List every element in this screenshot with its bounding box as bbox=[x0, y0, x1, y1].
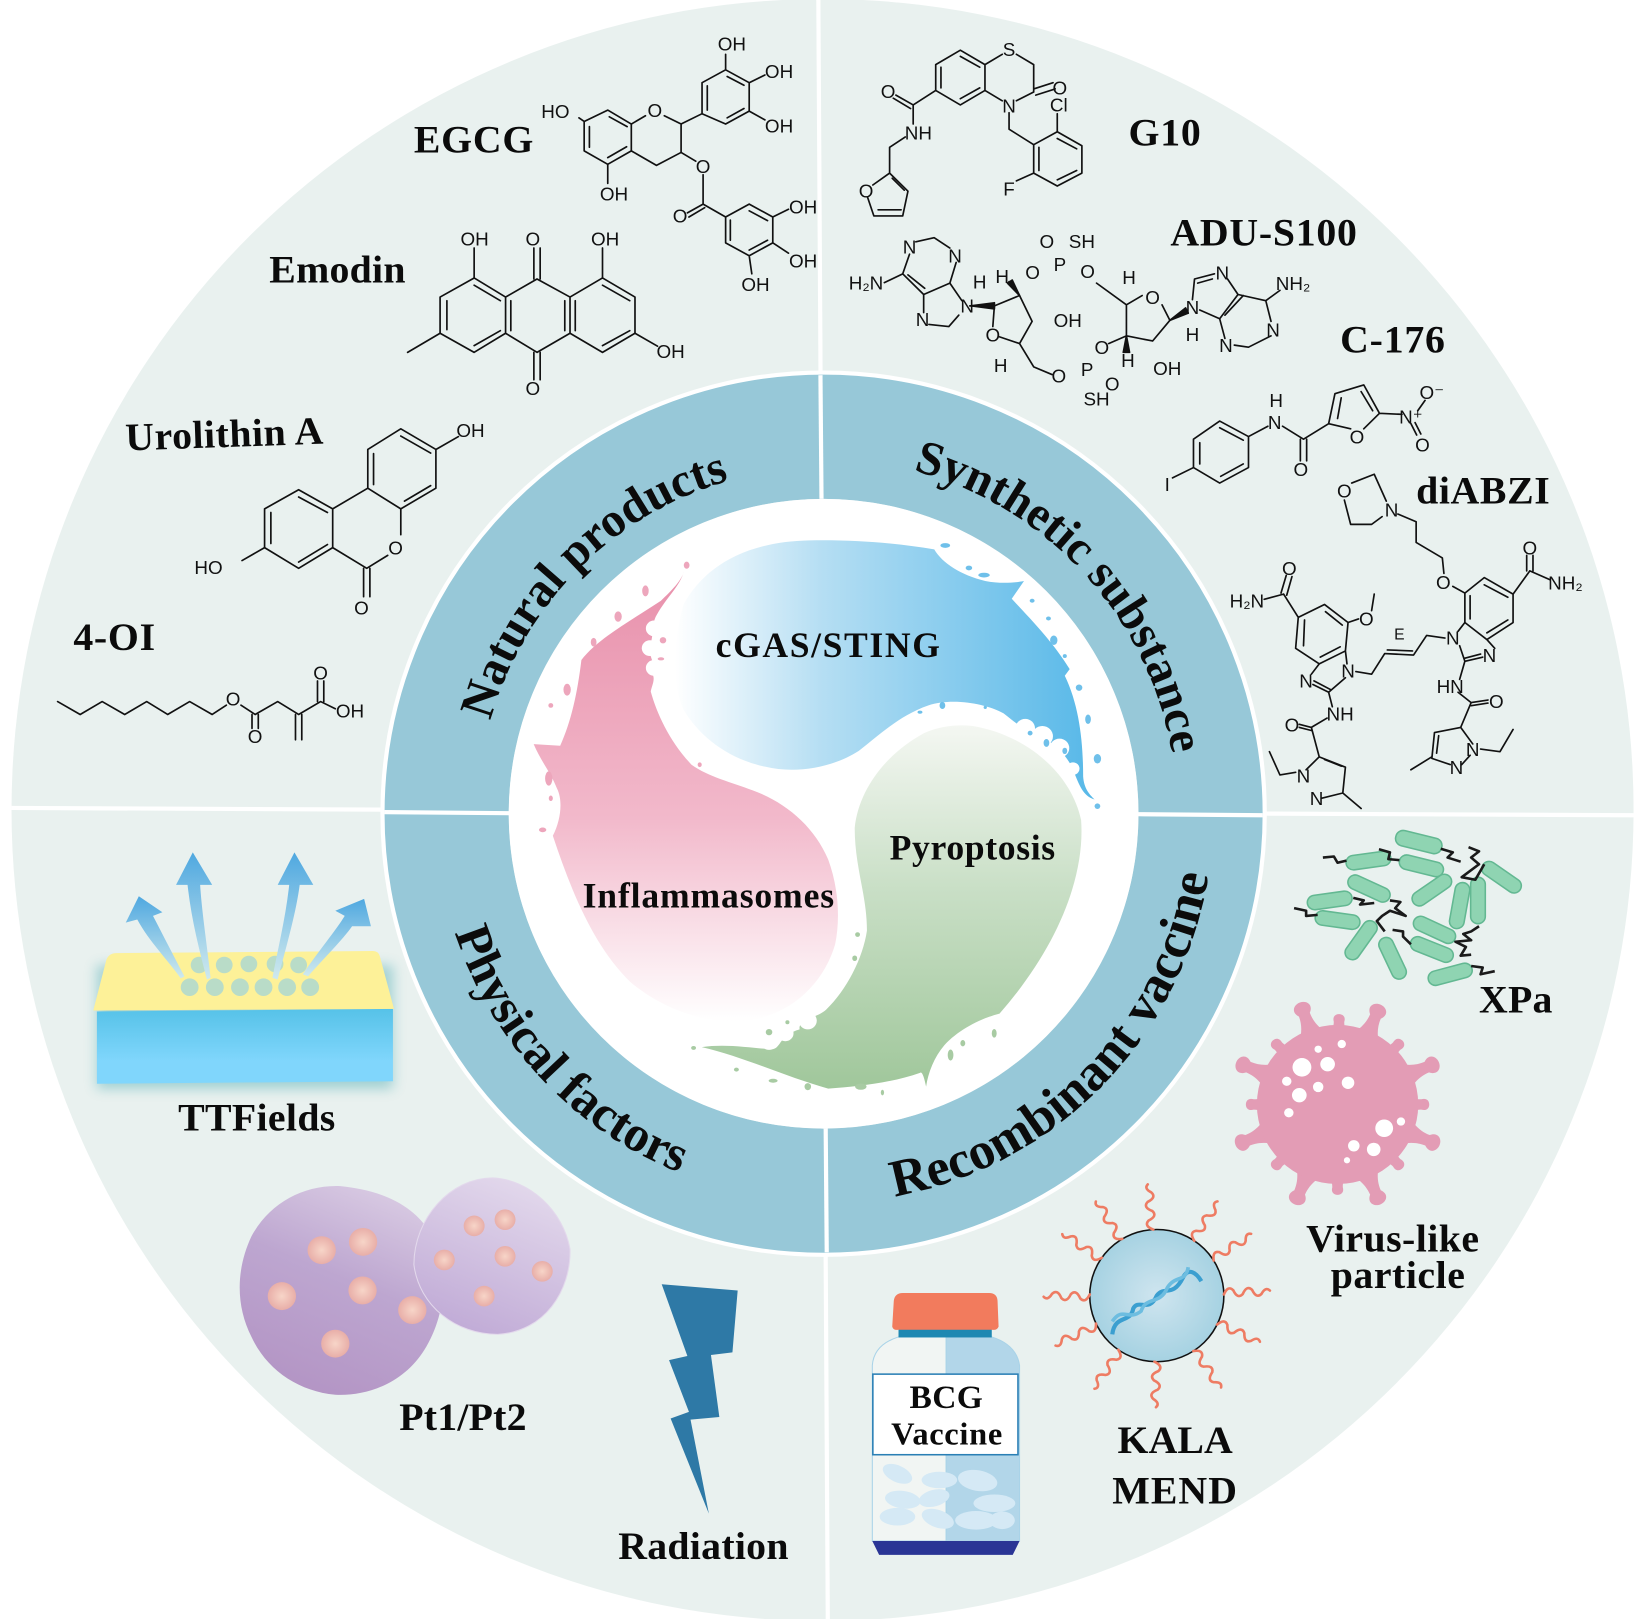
molecule: ADU-S100: N bbox=[960, 296, 974, 317]
molecule: C-176: H bbox=[1269, 390, 1283, 411]
icon: lightning bolt bbox=[662, 1284, 738, 1514]
molecule: Emodin: O bbox=[525, 378, 540, 399]
ring label: Recombinant vaccine: Recombinant vaccine bbox=[888, 873, 1208, 1197]
molecule: EGCG: OH bbox=[789, 251, 817, 272]
illustration: BCG vaccine bottle bbox=[872, 1293, 1020, 1555]
molecule: ADU-S100: O bbox=[1052, 365, 1066, 386]
molecule: ADU-S100: H bbox=[1121, 350, 1135, 371]
green swirl: Pyroptosis bbox=[691, 725, 1082, 1095]
label: KALA MEND bbox=[1112, 1418, 1237, 1512]
molecule: ADU-S100: O bbox=[1145, 287, 1160, 308]
ring label: Physical factors: Physical factors bbox=[455, 922, 686, 1170]
molecule: 4-OI: O bbox=[248, 726, 262, 747]
molecule: C-176: N⁺ bbox=[1399, 407, 1423, 428]
blue swirl: cGAS/STING bbox=[675, 540, 1101, 809]
molecule: ADU-S100: N bbox=[1215, 263, 1229, 283]
molecule: ADU-S100: P bbox=[1081, 359, 1093, 380]
inner white circle bbox=[509, 499, 1138, 1129]
molecule: EGCG: OH bbox=[718, 34, 746, 55]
molecule: ADU-S100: N bbox=[903, 237, 916, 258]
molecule: diABZI: HN bbox=[1437, 676, 1464, 697]
illustration: BCG vaccine bottle: Vaccine bbox=[891, 1416, 1002, 1451]
pink swirl: Inflammasomes bbox=[534, 562, 838, 1022]
molecule: ADU-S100: O bbox=[1039, 231, 1054, 252]
label: Virus-like particle: particle bbox=[1331, 1253, 1465, 1297]
molecule: C-176 bbox=[1165, 382, 1444, 495]
heading: C-176: C-176 bbox=[1340, 318, 1445, 361]
molecule: diABZI: N bbox=[1450, 757, 1463, 778]
molecule: ADU-S100: P bbox=[1054, 254, 1066, 275]
molecule: EGCG: OH bbox=[789, 197, 817, 217]
molecule: ADU-S100: H₂N bbox=[849, 272, 883, 293]
molecule: ADU-S100: H bbox=[995, 266, 1009, 287]
panel: synthetic substance bbox=[849, 39, 1583, 809]
label: Inflammasomes: Inflammasomes bbox=[583, 875, 834, 915]
arrows bbox=[126, 852, 371, 979]
molecule: diABZI: N bbox=[1341, 660, 1355, 681]
illustration: TTFields bbox=[93, 852, 394, 1089]
molecule: G10: O bbox=[1053, 78, 1067, 99]
ring label: Synthetic substance: Synthetic substance bbox=[916, 442, 1193, 752]
molecule: G10: F bbox=[1003, 178, 1015, 199]
molecule: EGCG bbox=[541, 34, 817, 295]
molecule: EGCG: OH bbox=[741, 274, 770, 295]
molecule: Urolithin A: O bbox=[388, 537, 403, 558]
molecule: ADU-S100: N bbox=[1219, 335, 1233, 356]
molecule: ADU-S100: O bbox=[1105, 374, 1120, 395]
molecule: 4-OI: O bbox=[226, 689, 240, 710]
label: XPa: XPa bbox=[1479, 978, 1553, 1021]
molecule: C-176: N bbox=[1268, 412, 1282, 433]
molecule: C-176: I bbox=[1165, 474, 1170, 495]
molecule: EGCG: OH bbox=[765, 115, 793, 136]
molecule: Urolithin A: OH bbox=[456, 420, 485, 441]
illustration: Pt1/Pt2 particles bbox=[240, 1178, 570, 1395]
molecule: ADU-S100: OH bbox=[1153, 358, 1181, 379]
molecule: ADU-S100: H bbox=[994, 355, 1007, 376]
heading: ADU-S100: ADU-S100 bbox=[1170, 211, 1357, 254]
molecule: C-176: O bbox=[1350, 426, 1364, 447]
label: Virus-like particle bbox=[1306, 1217, 1479, 1297]
molecule: diABZI: NH bbox=[1327, 704, 1354, 725]
molecule: diABZI: O bbox=[1436, 572, 1451, 593]
molecule: diABZI: O bbox=[1523, 537, 1537, 558]
molecule: Emodin: OH bbox=[591, 229, 619, 249]
molecule: G10: S bbox=[1003, 39, 1015, 60]
molecule: diABZI: N bbox=[1310, 788, 1323, 809]
molecule: G10 bbox=[859, 39, 1082, 216]
molecule: ADU-S100: O bbox=[1080, 261, 1095, 282]
label: Virus-like particle: Virus-like bbox=[1306, 1217, 1479, 1261]
molecule: EGCG: O bbox=[696, 156, 710, 177]
molecule: diABZI: N bbox=[1466, 739, 1480, 760]
molecule: diABZI: N bbox=[1299, 671, 1313, 692]
illustration: XPa rods bbox=[1294, 829, 1524, 987]
molecule: Emodin: O bbox=[525, 229, 540, 249]
ring band bbox=[446, 436, 1201, 1191]
label: Pt1/Pt2: Pt1/Pt2 bbox=[399, 1395, 527, 1439]
molecule: ADU-S100: SH bbox=[1083, 389, 1110, 410]
molecule: diABZI: O bbox=[1489, 691, 1504, 712]
illustration: BCG vaccine bottle: BCG bbox=[910, 1379, 983, 1416]
molecule: diABZI: N bbox=[1297, 766, 1310, 787]
center triskelion bbox=[534, 540, 1101, 1095]
molecule: diABZI: E bbox=[1394, 627, 1405, 644]
molecule: EGCG: O bbox=[673, 206, 687, 227]
panel: recombinant vaccine bbox=[872, 829, 1553, 1555]
molecule: 4-OI: OH bbox=[336, 701, 364, 722]
ring outline and dividers bbox=[382, 373, 1265, 1255]
molecule: EGCG: O bbox=[648, 100, 662, 121]
heading: G10: G10 bbox=[1129, 111, 1201, 155]
molecule: ADU-S100: N bbox=[1266, 319, 1280, 340]
heading: EGCG: EGCG bbox=[414, 118, 533, 161]
label: Radiation: Radiation bbox=[618, 1524, 789, 1568]
molecule: Emodin bbox=[408, 229, 685, 399]
molecule: ADU-S100: H bbox=[973, 271, 987, 292]
molecule: G10: O bbox=[859, 181, 873, 201]
molecule: ADU-S100: N bbox=[948, 246, 962, 266]
molecule: diABZI: O bbox=[1285, 715, 1299, 736]
molecule: EGCG: OH bbox=[600, 184, 628, 204]
label: KALA MEND: MEND bbox=[1112, 1469, 1237, 1512]
molecule: ADU-S100: H bbox=[1122, 267, 1136, 288]
molecule: ADU-S100: O bbox=[1094, 337, 1109, 358]
molecule: diABZI: N bbox=[1446, 628, 1460, 649]
panel: natural products bbox=[58, 34, 817, 747]
molecule: 4-OI bbox=[58, 662, 364, 747]
molecule: Urolithin A: HO bbox=[194, 557, 223, 578]
molecule: ADU-S100 bbox=[849, 231, 1310, 410]
molecule: diABZI bbox=[1230, 474, 1583, 809]
label: TTFields: TTFields bbox=[178, 1096, 335, 1139]
molecule: diABZI: O bbox=[1337, 481, 1352, 501]
panel: physical factors bbox=[93, 852, 789, 1568]
molecule: 4-OI: O bbox=[313, 662, 328, 683]
molecule: ADU-S100: O bbox=[985, 325, 1000, 345]
molecule: diABZI: NH₂ bbox=[1548, 573, 1583, 593]
molecule: Emodin: OH bbox=[461, 229, 489, 249]
molecule: diABZI: O bbox=[1282, 558, 1297, 579]
bottle label bbox=[873, 1374, 1018, 1455]
molecule: C-176: O⁻ bbox=[1420, 382, 1444, 403]
heading: Emodin: Emodin bbox=[269, 248, 406, 292]
label: Pyroptosis: Pyroptosis bbox=[890, 827, 1055, 867]
heading: diABZI: diABZI bbox=[1416, 469, 1550, 513]
illustration: virus-like particle bbox=[1226, 994, 1449, 1214]
molecule: C-176: O bbox=[1415, 435, 1430, 456]
heading: Urolithin A: Urolithin A bbox=[125, 409, 324, 459]
molecule: Urolithin A bbox=[194, 420, 485, 618]
molecule: ADU-S100: O bbox=[1025, 262, 1040, 283]
molecule: diABZI: N bbox=[1483, 645, 1496, 666]
illustration: KALA/MEND nanoparticle bbox=[1044, 1184, 1270, 1407]
heading: 4-OI: 4-OI bbox=[73, 615, 155, 659]
ring label: Natural products: Natural products bbox=[460, 460, 726, 720]
molecule: diABZI: H₂N bbox=[1230, 591, 1264, 612]
molecule: ADU-S100: OH bbox=[1054, 310, 1082, 331]
molecule: G10: N bbox=[1002, 96, 1016, 117]
molecule: ADU-S100: NH₂ bbox=[1276, 273, 1310, 294]
molecule: ADU-S100: H bbox=[1186, 324, 1199, 345]
molecule: ADU-S100: N bbox=[1186, 297, 1199, 318]
molecule: G10: NH bbox=[905, 123, 932, 143]
molecule: C-176: O bbox=[1294, 459, 1308, 480]
molecule: EGCG: HO bbox=[541, 101, 569, 122]
molecule: EGCG: OH bbox=[765, 61, 793, 82]
molecule: diABZI: N bbox=[1385, 500, 1398, 521]
label: cGAS/STING: cGAS/STING bbox=[716, 625, 940, 665]
molecule: G10: O bbox=[881, 81, 895, 102]
molecule: Emodin: OH bbox=[656, 341, 685, 362]
molecule: Urolithin A: O bbox=[354, 597, 369, 618]
label: KALA MEND: KALA bbox=[1118, 1418, 1233, 1462]
molecule: ADU-S100: SH bbox=[1069, 231, 1095, 252]
molecule: diABZI: O bbox=[1359, 609, 1374, 630]
molecule: G10: Cl bbox=[1050, 95, 1068, 116]
molecule: ADU-S100: N bbox=[916, 309, 929, 330]
